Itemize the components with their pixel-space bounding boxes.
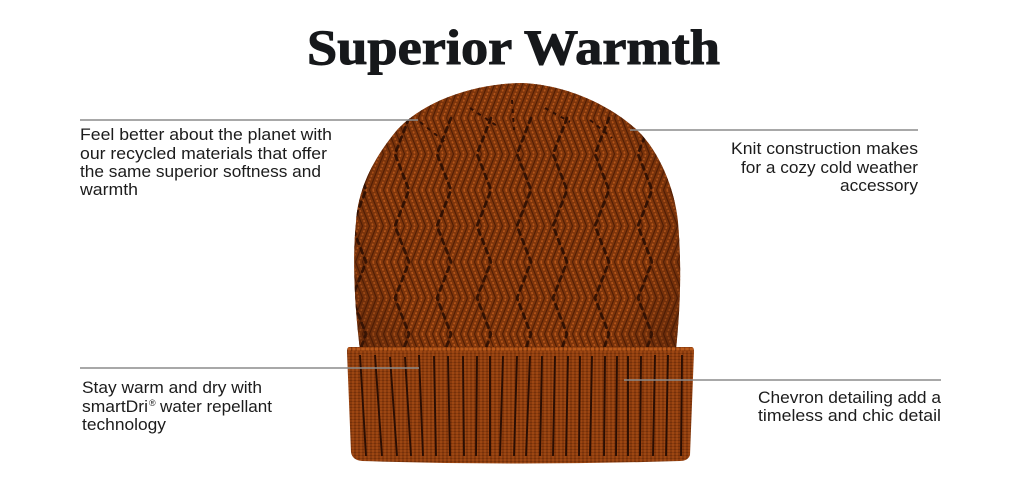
callout: smartDri water repellant: Stay warm and dry with [82, 378, 262, 397]
title: Superior Warmth [307, 19, 720, 75]
callout: smartDri water repellant [80, 368, 419, 434]
beanie illustration [345, 78, 694, 464]
beanie folded cuff with ribs [347, 347, 694, 464]
callout: smartDri water repellant: ® [149, 398, 156, 408]
callout: recycled materials: the same superior softness and [80, 162, 321, 181]
callout: recycled materials: warmth [79, 180, 138, 199]
callout: knit construction: for a cozy cold weather [741, 158, 918, 177]
callout: recycled materials: Feel better about the planet with [80, 125, 332, 144]
callout: smartDri water repellant: smartDri [82, 397, 148, 416]
callout: chevron detailing: Chevron detailing add a [758, 388, 942, 407]
callout: knit construction: accessory [840, 176, 919, 195]
callout: chevron detailing [624, 380, 942, 425]
callout: recycled materials: our recycled materials that offer [80, 144, 327, 163]
callout: recycled materials [79, 120, 418, 199]
callout: smartDri water repellant: water repellant [159, 397, 272, 416]
callout: chevron detailing: timeless and chic detail [758, 406, 941, 425]
callout: knit construction [630, 130, 919, 195]
callout: knit construction: Knit construction makes [731, 139, 918, 158]
beanie crown with chevron knit [345, 78, 690, 353]
callout: smartDri water repellant: technology [82, 415, 167, 434]
